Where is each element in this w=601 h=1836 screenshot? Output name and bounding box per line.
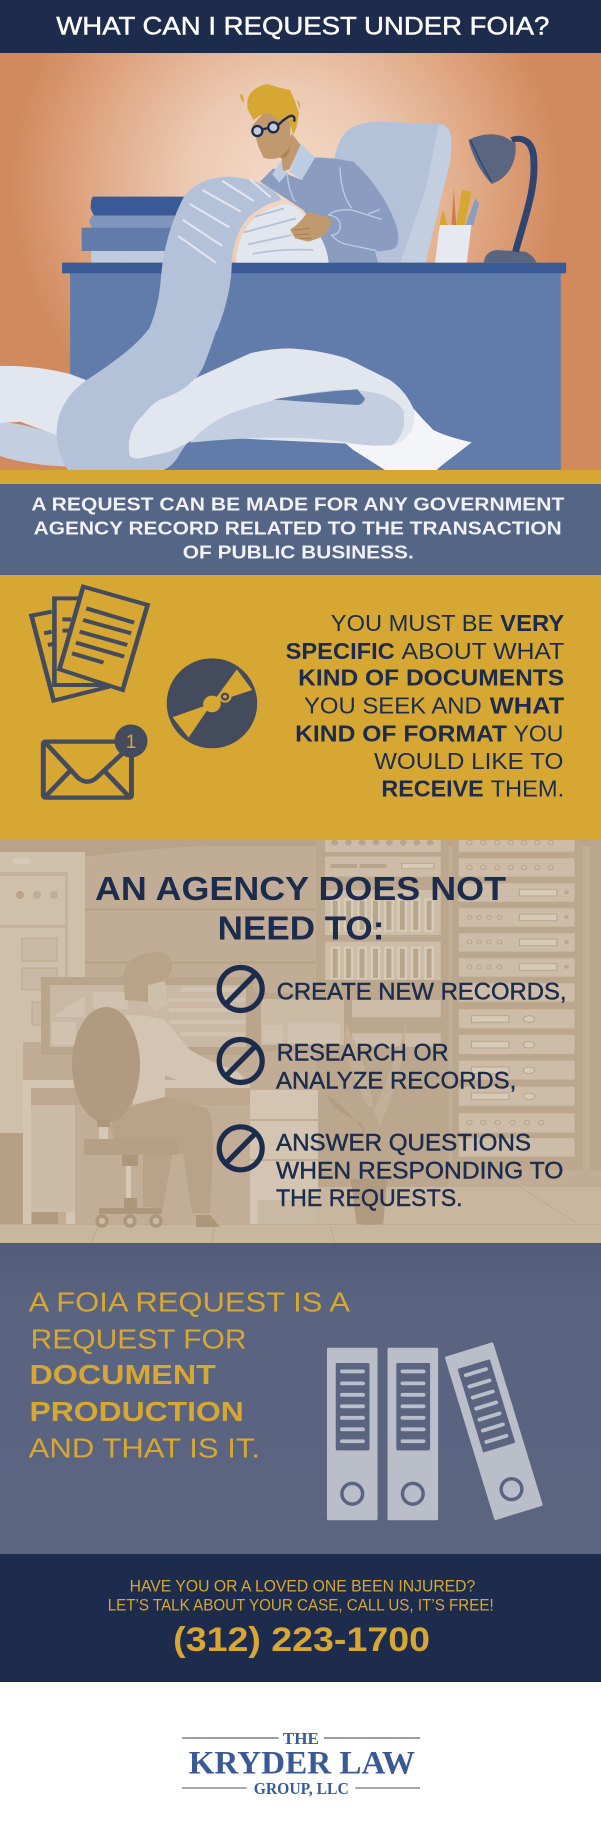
- phone number: (312) 223-1700: [173, 1621, 430, 1659]
- text: foia request: [29, 1287, 350, 1463]
- monitors: [41, 977, 352, 1055]
- desk: [62, 263, 566, 470]
- icon: binder 2: [388, 1348, 438, 1520]
- logo text: KRYDER LAW: [189, 1746, 415, 1782]
- text: agency heading: AN AGENCY DOES NOT: [95, 871, 507, 908]
- item: research or analyze: [276, 1040, 516, 1095]
- gold strip: [0, 470, 601, 484]
- text: statement: OF PUBLIC BUSINESS.: [183, 542, 414, 563]
- figure: seated operator: [72, 952, 245, 1227]
- icon: binder 3 leaning: [445, 1342, 543, 1520]
- text: be specific: KIND OF DOCUMENTS: [298, 665, 564, 691]
- text: foia request: DOCUMENT: [30, 1359, 216, 1390]
- text: be specific: RECEIVE: [381, 776, 484, 802]
- text: be specific: ABOUT WHAT: [402, 638, 564, 664]
- text: call to action: [108, 1578, 494, 1614]
- text: foia request: REQUEST FOR: [31, 1324, 247, 1354]
- icon: documents: [31, 587, 148, 701]
- item: answer questions: THE REQUESTS.: [276, 1185, 463, 1212]
- pen cup: [435, 188, 479, 263]
- text: be specific: WHAT: [490, 693, 564, 719]
- panel: logo: [0, 1682, 601, 1836]
- text: be specific: YOU SEEK AND: [304, 693, 482, 719]
- text: be specific: VERY: [500, 610, 565, 636]
- panel: call to action: [0, 1554, 601, 1682]
- item: answer questions: [276, 1130, 563, 1212]
- panel: header: [0, 0, 601, 53]
- text: be specific: YOU MUST BE: [331, 610, 493, 636]
- text: call to action: LET’S TALK ABOUT YOUR CASE, CALL US, IT’S FREE!: [108, 1596, 494, 1614]
- icon: binder 1: [327, 1348, 378, 1520]
- item: answer questions: WHEN RESPONDING TO: [276, 1158, 563, 1185]
- icon: envelope: [43, 742, 131, 798]
- icon: no sign 3: [219, 1127, 262, 1170]
- panel: request statement: [0, 484, 601, 575]
- text: call to action: HAVE YOU OR A LOVED ONE BEEN INJURED?: [130, 1578, 475, 1596]
- paper in hand: [236, 204, 332, 263]
- text: be specific: SPECIFIC: [286, 638, 395, 664]
- panel: document production: [0, 1243, 601, 1554]
- text: be specific: KIND OF FORMAT: [295, 721, 507, 747]
- plant: [328, 1020, 406, 1225]
- paper roll upper: [148, 177, 282, 331]
- icon: notification badge: [114, 724, 148, 758]
- item: research or analyze: ANALYZE RECORDS,: [276, 1068, 516, 1095]
- text: be specific: [286, 610, 565, 802]
- icon: no sign 1: [219, 968, 262, 1010]
- chair: [333, 122, 452, 263]
- icon: disc: [167, 658, 257, 748]
- panel: agency does not need to: [0, 840, 601, 1243]
- desk lamp: [468, 134, 537, 263]
- floor: [0, 1187, 601, 1243]
- text: foia request: A FOIA REQUEST IS A: [29, 1287, 350, 1318]
- illustration: server room wall: [0, 840, 601, 1133]
- cabinet: [0, 1133, 23, 1224]
- icon: notification badge: 1: [126, 732, 136, 753]
- panel: be specific: [0, 575, 601, 840]
- text: statement: AGENCY RECORD RELATED TO THE TRANSACTION: [34, 518, 562, 539]
- figure: man reading: [240, 84, 398, 263]
- hand: [290, 212, 332, 242]
- desk: [23, 1080, 318, 1224]
- text: be specific: WOULD LIKE TO: [374, 748, 563, 774]
- paper on floor: [0, 329, 472, 471]
- illustration: server racks: [316, 840, 601, 1190]
- text: statement: A REQUEST CAN BE MADE FOR ANY GOVERNMENT: [31, 494, 565, 515]
- panel: hero illustration: [0, 53, 601, 471]
- icon: no sign 2: [219, 1040, 262, 1082]
- logo text: GROUP, LLC: [254, 1779, 349, 1798]
- text: foia request: PRODUCTION: [30, 1396, 244, 1427]
- item: create new records: CREATE NEW RECORDS,: [277, 978, 566, 1005]
- books: [82, 197, 184, 263]
- logo text: THE: [283, 1729, 319, 1748]
- item: answer questions: ANSWER QUESTIONS: [276, 1130, 531, 1157]
- text: be specific: THEM.: [491, 776, 564, 802]
- title: WHAT CAN I REQUEST UNDER FOIA?: [56, 14, 549, 40]
- item: research or analyze: RESEARCH OR: [277, 1040, 448, 1067]
- text: foia request: AND THAT IS IT.: [29, 1432, 260, 1463]
- logo text: [189, 1729, 415, 1798]
- text: agency heading: [95, 871, 507, 947]
- text: agency heading: NEED TO:: [218, 910, 384, 947]
- text: statement: [31, 494, 565, 563]
- text: be specific: YOU: [514, 721, 563, 747]
- control panel: [0, 852, 85, 1042]
